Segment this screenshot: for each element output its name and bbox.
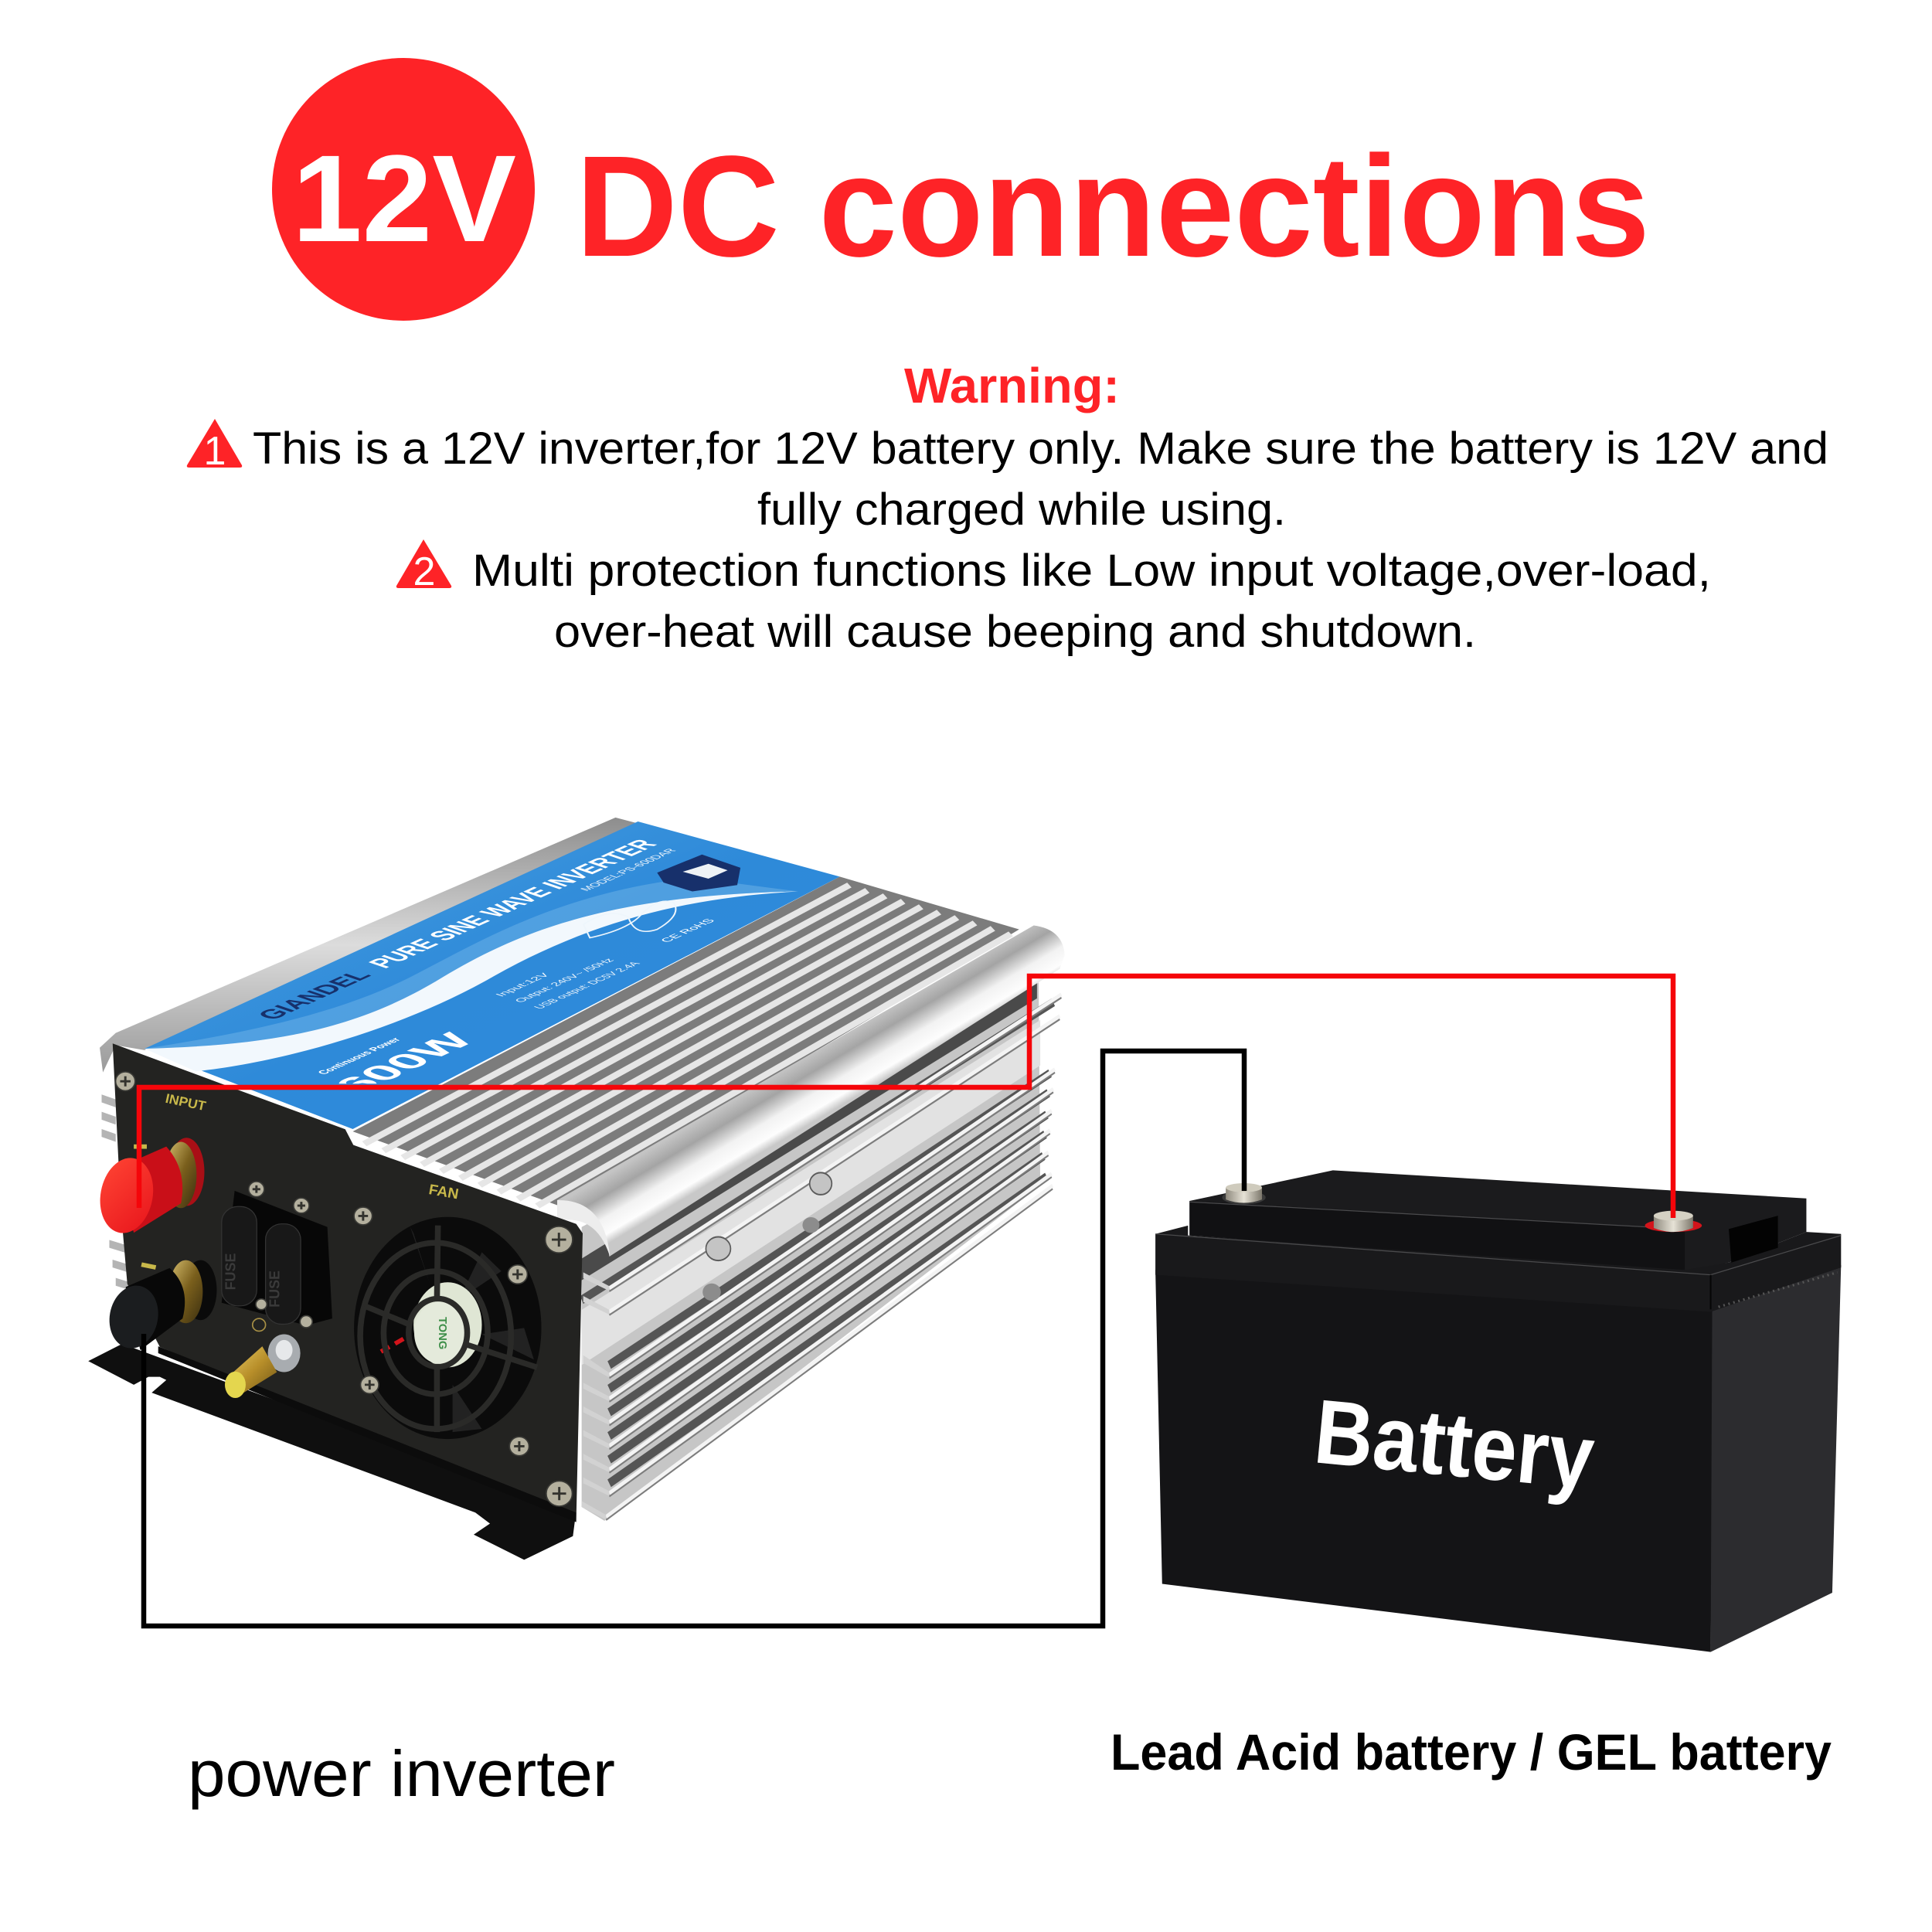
caption: battery type: Lead Acid battery / GEL battery [1111,1723,1832,1781]
battery side dots [1719,1272,1838,1307]
input label: INPUT [164,1090,208,1114]
title badge: 12V [272,58,535,321]
cooling fan: TONG [436,1317,449,1349]
fuse holders: FUSE [222,1253,239,1290]
fan hub label [413,1282,481,1367]
plate screws [116,1072,573,1506]
product name: PURE SINE WAVE INVERTER [362,837,664,971]
mounting foot [88,1344,577,1560]
warning line 2: fully charged while using. [757,485,1286,535]
fin tips [582,1272,609,1519]
sine wave icon [583,901,675,937]
battery front face [1155,1270,1714,1652]
negative terminal [1222,1183,1266,1204]
battery side face [1711,1265,1841,1652]
positive terminal [1645,1211,1702,1232]
specification text [492,957,643,1010]
600W rating: 600W [323,1029,485,1097]
specification text: USB output: DC5V 2.4A [531,961,643,1010]
shadow under bar [582,978,1037,1281]
wave swoosh [145,892,798,1071]
cooling fan [354,1217,542,1439]
red positive terminal [94,1138,204,1237]
icon: warning triangle 2 [396,539,451,594]
title badge: 12V: 12V [292,129,516,267]
icon: warning triangle 1: 1 [204,429,226,474]
badge shield [657,855,740,892]
fan guard [360,1226,537,1432]
warning line 3: Multi protection functions like Low input voltage,over-load, [472,546,1711,596]
caption: power inverter: power inverter [188,1737,615,1810]
wave band [145,878,798,1049]
fin shadow bands [582,1002,1053,1483]
fin stubs left [102,1094,131,1291]
warning heading: Warning: [904,358,1120,413]
red fan wires [381,1337,407,1352]
side fin body [582,982,1040,1521]
fuse holders: FUSE [266,1270,283,1308]
icon: warning triangle 1 [187,419,242,474]
polarity marks [134,1145,156,1270]
side fin screws [702,1172,832,1301]
plate face [113,1043,583,1522]
battery label: Battery [1311,1380,1598,1509]
plate lower bend [158,1346,577,1522]
power inverter illustration [88,818,1065,1560]
fin lower edges [606,998,1061,1520]
fuse holders [222,1191,332,1325]
rounded aluminium bar [557,925,1065,1257]
inverter side: fins and bar [557,925,1065,1521]
inverter top: strip, ridges and blue label [100,818,1019,1291]
fin top edges [606,995,1061,1517]
ground stud [225,1335,301,1398]
black negative terminal [104,1260,216,1352]
brand text: GIANDEL [251,968,377,1022]
flat mounting band [582,1020,1040,1365]
specification text: Input:12V [492,971,553,998]
blue label panel [145,821,840,1129]
warning text block [187,358,1828,657]
warning line 1: This is a 12V inverter,for 12V battery only. Make sure the battery is 12V and [253,423,1828,474]
fan label: FAN [427,1182,460,1202]
battery illustration [1155,1170,1841,1652]
model number: MODEL:PS-600DAR [578,848,679,893]
top heat-sink ridges [353,876,1019,1206]
battery lid [1189,1170,1806,1270]
red positive wire [139,976,1673,1218]
front plate [88,1043,583,1560]
black negative wire [144,1051,1244,1626]
title: DC connections: DC connections [576,127,1650,287]
battery handle recess [1729,1216,1778,1263]
icon: warning triangle 2: 2 [413,549,435,594]
continuous power label: Continuous Power [315,1037,404,1076]
battery shoulder [1155,1226,1841,1311]
warning line 4: over-heat will cause beeping and shutdown. [554,607,1476,657]
specification text: Output: 240V~ /50Hz [512,957,617,1004]
certification text: CE RoHS [658,918,718,944]
top silver strip [100,818,638,1073]
icon: ground symbol [253,1318,266,1331]
